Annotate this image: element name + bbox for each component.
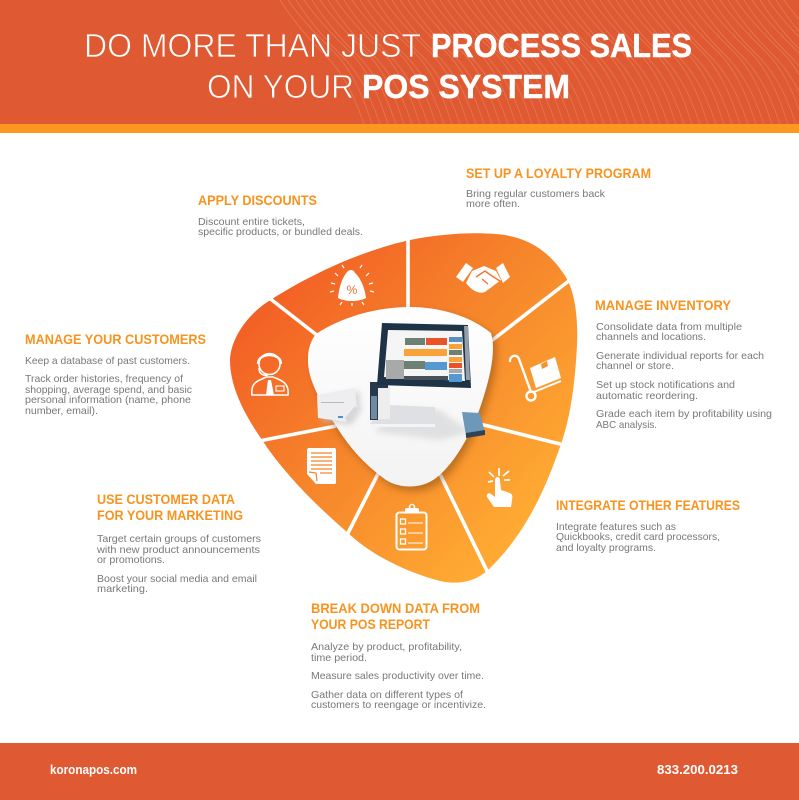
footer bar	[0, 743, 799, 800]
header banner	[0, 0, 799, 133]
text: manage your customers: Keep a database of past customers.	[25, 356, 190, 367]
title	[84, 27, 692, 105]
text: manage inventory: ABC analysis.	[596, 420, 657, 431]
text: manage inventory: Set up stock notifications and	[596, 380, 735, 391]
text: break down data from your pos report: YOUR POS REPORT	[311, 617, 431, 632]
text: manage inventory: Consolidate data from multiple	[596, 322, 742, 333]
text: set up a loyalty program: SET UP A LOYALTY PROGRAM	[466, 166, 651, 181]
text: break down data from your pos report: Gather data on different types of	[311, 690, 463, 701]
segmented wheel	[230, 233, 577, 583]
text: manage inventory: automatic reordering.	[596, 391, 698, 402]
icon: discount tag	[330, 265, 374, 306]
card reader	[462, 412, 485, 438]
text: break down data from your pos report: BREAK DOWN DATA FROM	[311, 601, 480, 616]
title: PROCESS SALES	[431, 27, 692, 64]
text: manage inventory: channels and locations.	[596, 332, 706, 343]
centre panel	[308, 307, 497, 491]
stand arm	[370, 382, 435, 427]
icon: document	[307, 448, 336, 484]
text: use customer data for your marketing: with new product announcements	[96, 545, 260, 556]
title: ON YOUR	[207, 68, 354, 105]
icon: handshake	[456, 263, 510, 293]
text: set up a loyalty program: more often.	[466, 199, 520, 210]
footer bar: koronapos.com	[50, 763, 137, 777]
icon: hand truck with box	[510, 356, 561, 400]
text: use customer data for your marketing: FOR YOUR MARKETING	[97, 508, 243, 523]
icon: discount tag: %	[347, 283, 358, 297]
text: integrate other features: and loyalty programs.	[556, 543, 656, 554]
text: manage inventory: Grade each item by profitability using	[596, 409, 772, 420]
text: break down data from your pos report: Analyze by product, profitability,	[311, 642, 462, 653]
text: set up a loyalty program: Bring regular customers back	[466, 189, 606, 200]
text: manage inventory: channel or store.	[596, 361, 674, 372]
device shadow	[375, 410, 470, 440]
text: manage your customers: MANAGE YOUR CUSTOMERS	[25, 332, 206, 347]
text: manage your customers: shopping, average spend, and basic	[25, 385, 192, 396]
text: integrate other features: INTEGRATE OTHER FEATURES	[556, 498, 740, 513]
text: manage your customers	[25, 332, 206, 417]
text: manage your customers: personal information (name, phone	[25, 395, 191, 406]
text: use customer data for your marketing: marketing.	[97, 584, 148, 595]
text: use customer data for your marketing: USE CUSTOMER DATA	[97, 492, 235, 507]
receipt printer	[317, 388, 361, 425]
POS terminal illustration	[317, 323, 485, 440]
text: manage inventory: Generate individual reports for each	[596, 351, 764, 362]
text: apply discounts: APPLY DISCOUNTS	[198, 193, 317, 208]
text: apply discounts	[198, 193, 363, 238]
text: use customer data for your marketing: or promotions.	[97, 555, 165, 566]
text: apply discounts: specific products, or bundled deals.	[198, 227, 363, 238]
text: apply discounts: Discount entire tickets,	[198, 217, 305, 228]
stand base	[370, 405, 437, 428]
text: break down data from your pos report: customers to reengage or incentivize.	[311, 700, 486, 711]
text: manage inventory: MANAGE INVENTORY	[595, 298, 731, 313]
icon: customer service agent	[252, 354, 288, 395]
text: use customer data for your marketing	[96, 492, 261, 595]
text: manage inventory	[595, 298, 772, 431]
touchscreen monitor	[377, 323, 471, 388]
text: use customer data for your marketing: Boost your social media and email	[97, 574, 257, 585]
text: manage your customers: number, email).	[25, 406, 98, 417]
text: integrate other features: Quickbooks, credit card processors,	[556, 532, 720, 543]
text: set up a loyalty program	[466, 166, 651, 210]
text: manage your customers: Track order histories, frequency of	[25, 374, 183, 385]
text: break down data from your pos report	[311, 601, 486, 711]
icon: clipboard checklist	[396, 504, 426, 550]
text: integrate other features: Integrate features such as	[556, 522, 676, 533]
title: POS SYSTEM	[362, 68, 570, 105]
text: integrate other features	[556, 498, 740, 554]
text: use customer data for your marketing: Target certain groups of customers	[97, 534, 261, 545]
text: break down data from your pos report: time period.	[311, 653, 367, 664]
icon: pointing hand	[487, 468, 512, 507]
title: DO MORE THAN JUST	[84, 27, 421, 64]
footer bar: 833.200.0213	[657, 763, 738, 777]
segment dividers	[259, 236, 570, 573]
text: break down data from your pos report: Measure sales productivity over time.	[311, 671, 484, 682]
